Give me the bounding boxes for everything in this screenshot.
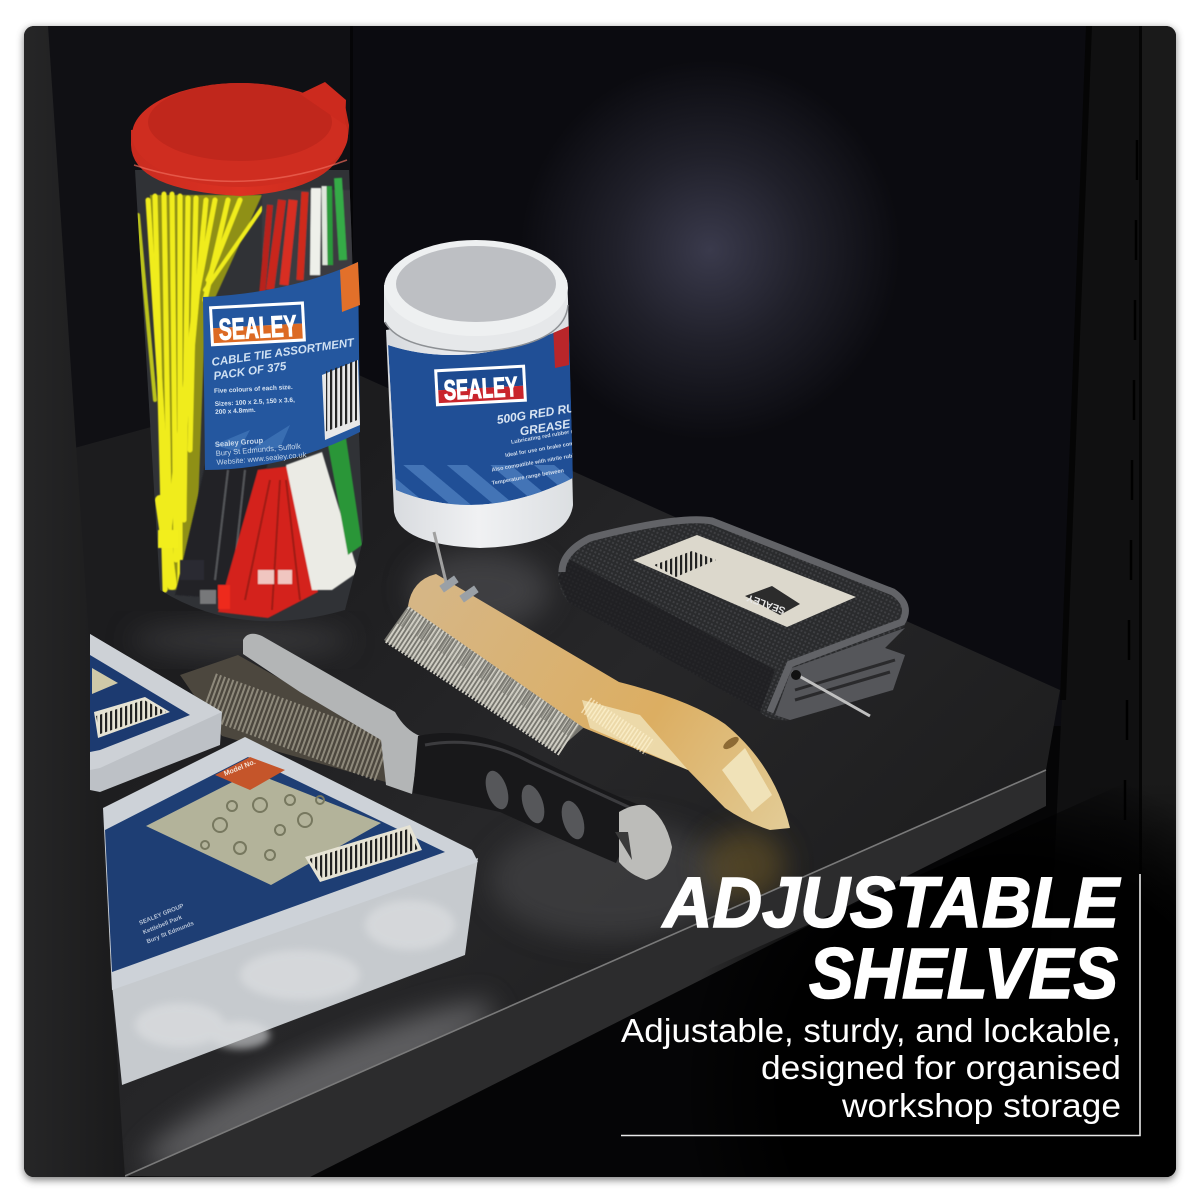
box side bbox=[112, 858, 478, 1085]
shelf front lip bbox=[125, 770, 1046, 1177]
jar label address: Bury St Edmunds, Suffolk bbox=[215, 442, 301, 458]
lid beige card bbox=[146, 772, 381, 885]
lid address text bbox=[139, 902, 196, 945]
green ties bundle bbox=[328, 438, 362, 555]
description: Adjustable, sturdy, and lockable, bbox=[621, 1012, 1121, 1049]
cabinet left post bbox=[24, 26, 125, 1177]
lid address text: SEALEY GROUP bbox=[139, 903, 185, 927]
jar label details: Sizes: 100 x 2.5, 150 x 3.6, bbox=[215, 397, 295, 408]
tin label title: 500G RED RUBBER bbox=[496, 395, 610, 427]
tin body bbox=[386, 300, 573, 548]
tin blue label bbox=[388, 326, 573, 505]
jar label details: 200 x 4.8mm. bbox=[215, 407, 256, 416]
description bbox=[621, 1012, 1121, 1124]
cabinet back wall bbox=[48, 26, 1092, 726]
shelf surface bbox=[60, 372, 1060, 1190]
jar label title: CABLE TIE ASSORTMENT bbox=[211, 337, 356, 369]
jar label address: Website: www.sealey.co.uk bbox=[216, 450, 307, 467]
small parts box, front bbox=[103, 737, 478, 1085]
jar label bbox=[203, 262, 360, 470]
description: designed for organised bbox=[761, 1049, 1121, 1086]
jar label details bbox=[214, 384, 296, 416]
lid address text: Kettlebell Park bbox=[142, 915, 184, 936]
jar glass bbox=[135, 170, 363, 621]
grey back bbox=[243, 634, 420, 794]
jar of cable ties bbox=[131, 82, 363, 621]
jar lid bbox=[131, 82, 349, 196]
pouch product label: SEALEY bbox=[745, 591, 787, 616]
wooden wire brush bbox=[384, 532, 790, 830]
heading: SHELVES bbox=[809, 935, 1118, 1014]
jar label logo bbox=[209, 301, 306, 347]
description: workshop storage bbox=[841, 1087, 1121, 1124]
jar label title: PACK OF 375 bbox=[213, 361, 288, 383]
red ties bundle bbox=[218, 466, 318, 618]
hanging hook bbox=[434, 532, 446, 582]
lid orange tag bbox=[215, 757, 285, 790]
yellow cable ties bbox=[138, 194, 262, 590]
tin logo: SEALEY bbox=[443, 371, 519, 406]
dark caption gradient bbox=[400, 760, 1176, 1177]
jar label address: Sealey Group bbox=[215, 436, 264, 449]
tin logo bbox=[434, 365, 527, 406]
lid barcode bbox=[305, 825, 422, 882]
grease tin bbox=[384, 240, 573, 548]
small parts box, back bbox=[90, 634, 222, 792]
black ties bundle bbox=[175, 460, 268, 600]
pouch product label bbox=[633, 535, 856, 627]
tin label title: GREASE TIN bbox=[519, 413, 594, 439]
tin label details: Temperature range between bbox=[491, 468, 565, 487]
tin label title bbox=[497, 404, 572, 435]
black rubber grip bbox=[413, 733, 642, 863]
jar label logo: SEALEY bbox=[218, 310, 297, 347]
zipped tool pouch bbox=[558, 517, 908, 720]
tin label details bbox=[492, 430, 572, 484]
dark wire bristles bbox=[180, 655, 386, 782]
wooden back bbox=[408, 574, 790, 830]
box lid bbox=[103, 737, 478, 990]
jar label address bbox=[215, 438, 306, 465]
red white and green cable ties bbox=[262, 178, 352, 295]
tin label details: Lubricating red rubber grease bbox=[511, 426, 589, 446]
heading: ADJUSTABLE bbox=[661, 864, 1122, 943]
wire bristles bbox=[384, 606, 590, 752]
small parts box, front: Model No. bbox=[223, 759, 257, 778]
tin label details: Ideal for use on brake components bbox=[505, 437, 596, 459]
jar label details: Five colours of each size. bbox=[214, 384, 293, 395]
heading bbox=[661, 864, 1122, 1014]
cabinet right door post bbox=[1057, 26, 1176, 1177]
caption bbox=[621, 864, 1140, 1136]
tin label details: Also compatible with nitrile rubber bbox=[491, 452, 582, 474]
white ties bundle bbox=[286, 452, 358, 590]
grey and black wire brush bbox=[180, 634, 672, 880]
grey end cap bbox=[619, 805, 672, 880]
lid address text: Bury St Edmunds bbox=[146, 921, 196, 945]
tin lid bbox=[384, 280, 568, 352]
